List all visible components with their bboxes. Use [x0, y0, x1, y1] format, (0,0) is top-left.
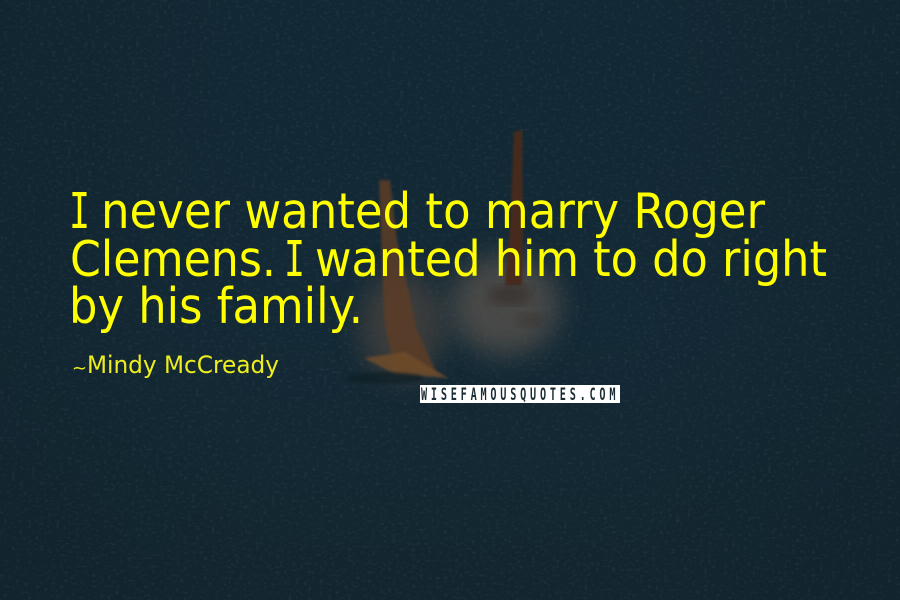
- quote text: wanted him to do right: [315, 231, 827, 288]
- watermark badge: WISEFAMOUSQUOTES.COM: [421, 385, 619, 405]
- quote text: [69, 183, 827, 335]
- photo: left swimmer leg and splash: [347, 180, 448, 384]
- quote text: I: [284, 231, 305, 288]
- attribution: Mindy McCready: [87, 351, 279, 379]
- quote text: Clemens.: [70, 231, 276, 288]
- quote text: never wanted to marry Roger: [101, 183, 766, 240]
- attribution: ~: [72, 358, 87, 379]
- quote text: by his family.: [69, 278, 363, 335]
- photo: right swimmer leg and splash: [450, 130, 560, 355]
- quote text: I: [69, 183, 90, 240]
